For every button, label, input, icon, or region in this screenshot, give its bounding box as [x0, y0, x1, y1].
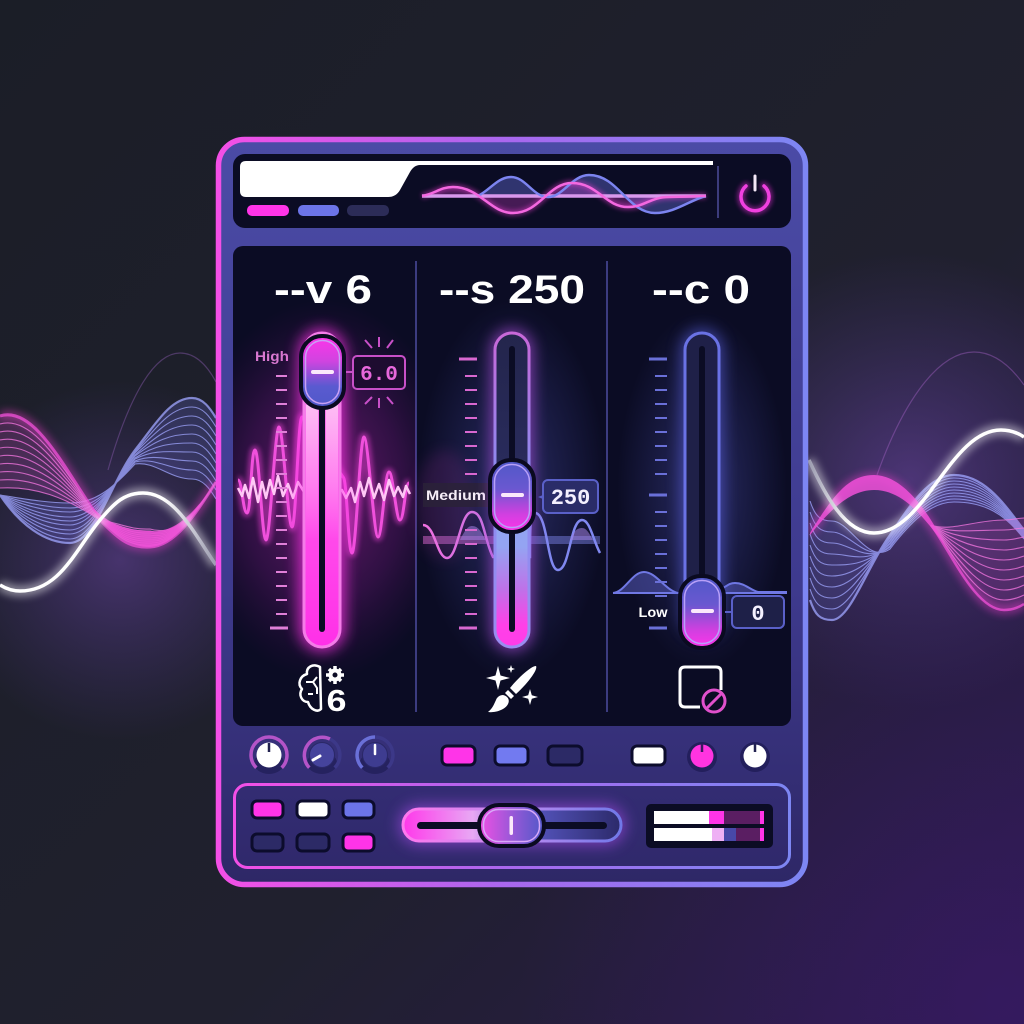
- left blue line family: [0, 398, 216, 543]
- icon: square with no symbol: [680, 667, 725, 712]
- right pink glow: [810, 477, 1024, 610]
- bottom control panel: [234, 784, 790, 868]
- left blue ribbon fill: [0, 398, 216, 543]
- column 3 glow: [617, 310, 787, 670]
- right pink line family: [931, 518, 1024, 610]
- horizontal slider: [398, 804, 626, 846]
- device panel: [188, 140, 806, 884]
- slider track: [298, 328, 346, 652]
- right pink solid ribbon: [810, 475, 945, 545]
- column dividers: [415, 261, 608, 712]
- header divider: [717, 166, 719, 218]
- left white wave glow: [0, 493, 216, 591]
- right white wave glow: [809, 430, 1024, 533]
- right blue ribbon fill: [810, 475, 1024, 620]
- left sound wave ribbon: [0, 353, 216, 591]
- value display 6.0: [346, 337, 405, 408]
- value display 0: [725, 596, 784, 628]
- left pink ribbon fill: [0, 416, 88, 512]
- left pink glow: [0, 415, 216, 547]
- scale ticks: [649, 359, 667, 628]
- header title block: [240, 161, 713, 197]
- column: chaos slider: [613, 268, 787, 712]
- left pink line family: [0, 415, 216, 547]
- icon: brush and sparkles: [486, 665, 538, 712]
- level meters: [646, 804, 773, 848]
- waveform: flat: [613, 572, 787, 593]
- slider handle: [680, 576, 724, 648]
- header indicator pills: [247, 205, 389, 216]
- knob row: [251, 737, 770, 774]
- right faint wave: [877, 352, 1024, 475]
- column 2 glow: [417, 300, 607, 680]
- column: stylize slider: [415, 268, 607, 712]
- knob: white small: [740, 742, 770, 772]
- left pink solid ribbon: [90, 482, 216, 547]
- column: version slider: [233, 275, 416, 712]
- right sound wave ribbon: [809, 352, 1024, 620]
- column 1 pink glow: [233, 322, 416, 658]
- heading: --s 250: --s 250: [439, 268, 585, 312]
- value display 250: 250: [551, 486, 590, 511]
- right white wave: [809, 430, 1024, 533]
- heading: --c 0: --c 0: [652, 268, 750, 312]
- header bar: [233, 154, 791, 228]
- main slider screen: [188, 246, 791, 726]
- label: Medium: Medium: [426, 487, 486, 503]
- label: High: High: [255, 349, 289, 364]
- icon: brain with gear and 6: [300, 665, 346, 718]
- label: Low: Low: [638, 605, 668, 620]
- waveform: smooth: [423, 512, 600, 570]
- header waveform: [422, 175, 706, 213]
- value display 6.0: 6.0: [360, 364, 398, 387]
- left faint wave: [108, 353, 216, 470]
- slider track: [680, 328, 724, 638]
- heading: --v 6: --v 6: [274, 268, 372, 312]
- label: Medium: [423, 483, 489, 507]
- scale ticks: [459, 359, 477, 628]
- slider handle: [479, 805, 544, 846]
- panel body: [218, 140, 806, 884]
- left white wave: [0, 493, 216, 591]
- right pink ribbon fill: [931, 518, 1024, 610]
- toggle buttons: [442, 746, 665, 765]
- slider handle: [490, 460, 534, 532]
- slider handle: [301, 336, 344, 408]
- icon: power: [741, 176, 769, 211]
- value display 250: [538, 480, 598, 513]
- knob: indigo pink: [304, 737, 340, 774]
- right blue line family: [810, 475, 1024, 620]
- value display 0: 0: [751, 602, 765, 627]
- button grid: [252, 801, 374, 851]
- knob: pink: [687, 742, 717, 772]
- scale ticks: [270, 376, 288, 628]
- icon: brain with gear and 6: 6: [326, 683, 346, 718]
- knob: indigo blue: [357, 737, 393, 774]
- background glow: [0, 250, 1024, 1024]
- waveform: spiky pink: [238, 417, 410, 553]
- slider track: [490, 328, 534, 652]
- knob: white: [251, 737, 287, 774]
